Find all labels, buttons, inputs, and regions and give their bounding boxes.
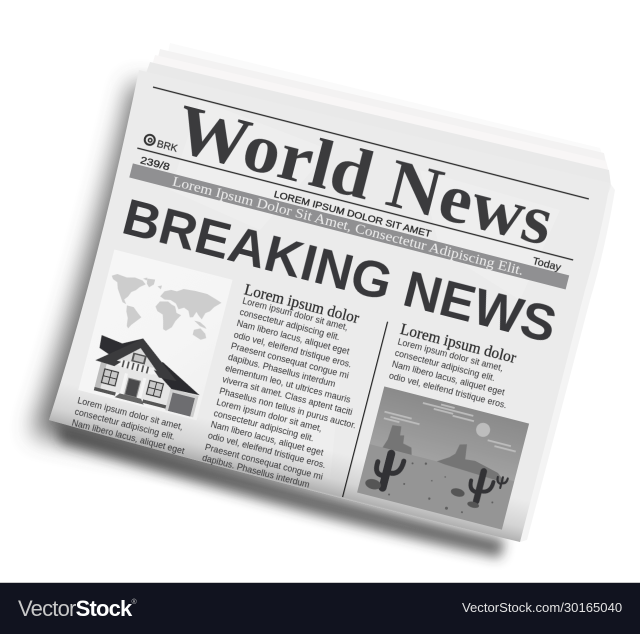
article body text: Lorem ipsum dolor sit amet, (241, 296, 349, 332)
headline: BREAKING NEWS (117, 188, 562, 354)
article body text: Lorem ipsum dolor sit amet, (216, 397, 323, 433)
article body text: elementum leo, ut ultrices mauris (224, 363, 352, 405)
clouds (384, 402, 516, 452)
article body text: viverra sit amet. Class aptent taciti (221, 374, 354, 417)
icon: BRK logo (144, 134, 156, 146)
article body text: Nam libero lacus, aliquet eget (236, 318, 351, 357)
footer url: VectorStock.com/30165040 (462, 600, 622, 615)
rocks (365, 478, 479, 508)
right article body text: odio vel, eleifend tristique eros. (388, 370, 508, 410)
footer logo: VectorStock® (18, 596, 136, 621)
footer bar (0, 582, 640, 634)
article body text: dapibus. Phasellus interdum (227, 352, 337, 389)
paper shadow (32, 82, 505, 558)
article body text: consectetur adipiscing elit. (239, 307, 341, 342)
front page sheet (49, 76, 607, 542)
article body text: odio vel, eleifend tristique eros. (207, 431, 327, 470)
right article body text: Lorem ipsum dolor sit amet, (397, 337, 504, 373)
BRK label: BRK (156, 138, 179, 155)
article body text: Praesent consequat congue mi (230, 341, 350, 380)
grey banner: Lorem Ipsum Dolor Sit Amet, Consectetur Adipiscing Elit. (171, 175, 525, 279)
subtitle: LOREM IPSUM DOLOR SIT AMET (273, 189, 433, 239)
house (88, 328, 210, 418)
article body text: Nam libero lacus, aliquet eget (210, 419, 325, 458)
world map (100, 269, 223, 349)
article body text: dapibus. Phasellus interdum (201, 453, 311, 490)
ground speckles (388, 462, 494, 514)
mesas (382, 425, 504, 482)
column divider (342, 322, 388, 497)
masthead lower rule (137, 147, 573, 261)
article heading: Lorem ipsum dolor (242, 281, 362, 327)
masthead top rule (153, 86, 589, 200)
stacked pages behind front page (140, 43, 615, 542)
article column: middle (200, 281, 384, 497)
panel: desert scene (357, 386, 529, 530)
right article body text (388, 337, 517, 410)
article body text: consectetur adipiscing elit. (213, 408, 315, 443)
house caption: Lorem ipsum dolor sit amet, (77, 395, 184, 432)
right article body text: Nam libero lacus, aliquet eget (391, 359, 506, 398)
issue number: 239/8 (139, 154, 171, 173)
right article body text: consectetur adipiscing elit. (394, 348, 496, 383)
article body text (201, 296, 380, 497)
cacti (374, 450, 509, 504)
article body text: odio vel, eleifend tristique eros. (233, 329, 353, 369)
date label: Today (531, 255, 563, 274)
article body text: Phasellus non tellus in purus auctor. (218, 386, 357, 430)
article body text: Praesent consequat congue mi (204, 442, 324, 482)
moon (476, 422, 490, 437)
article column: right (388, 321, 521, 410)
house caption: consectetur adipiscing elit. (74, 406, 176, 442)
masthead title: World News (168, 91, 561, 261)
panel: house image (78, 249, 233, 420)
house caption: Nam libero lacus, aliquet eget (71, 418, 186, 456)
grey banner (129, 163, 569, 290)
newspaper illustration (19, 49, 615, 566)
house caption (71, 395, 192, 456)
right article heading: Lorem ipsum dolor (398, 321, 519, 367)
